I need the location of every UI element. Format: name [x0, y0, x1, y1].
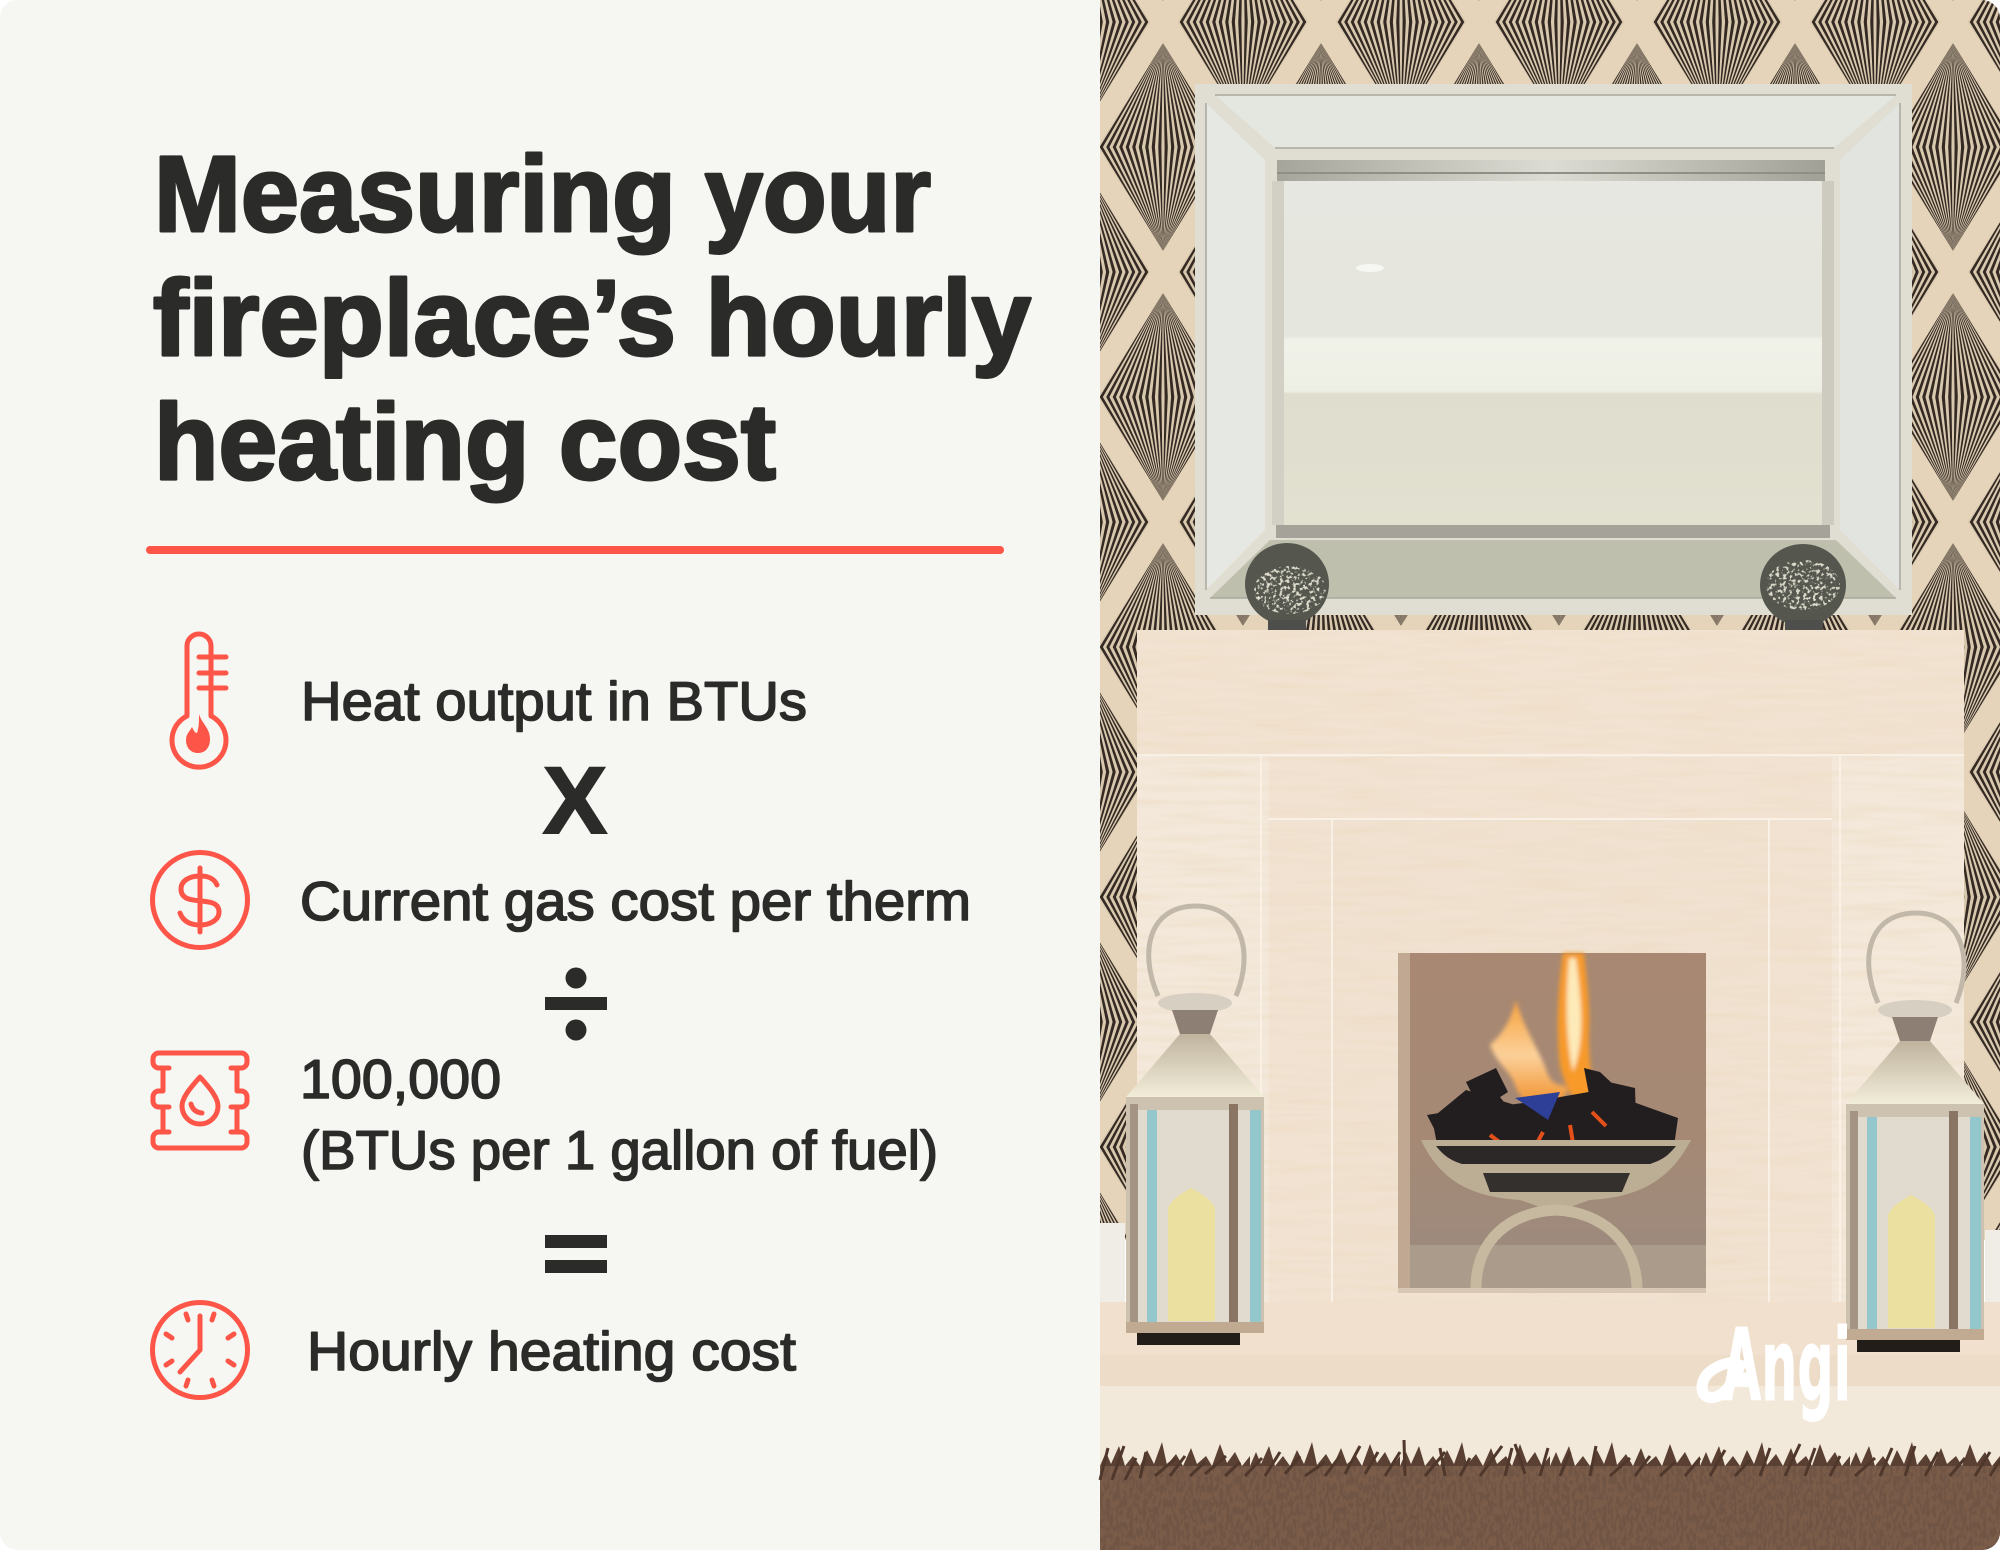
fire opening [1398, 953, 1706, 1293]
title rule [146, 546, 1004, 554]
baseboards [1100, 1223, 2000, 1302]
hearth and carpet [1100, 1302, 2000, 1476]
title: Measuring your [154, 133, 931, 254]
photo: fireplace [1100, 0, 2000, 1550]
flames [1488, 950, 1594, 1098]
fire basket [1421, 1140, 1691, 1288]
lantern: left [1126, 906, 1264, 1345]
fireplace surround [1137, 630, 1964, 1305]
logo: Angi [1696, 1324, 1847, 1422]
text: gas cost: Current gas cost per therm [300, 870, 971, 932]
icon: dollar coin [152, 852, 248, 948]
icon: fuel barrel [153, 1053, 247, 1148]
text: heat output: Heat output in BTUs [301, 670, 807, 732]
panel: formula [0, 0, 1100, 1550]
coal embers [1488, 1092, 1608, 1140]
mirror [1195, 84, 1912, 615]
rug [1100, 1440, 2000, 1550]
text: BTUs per gallon: 100,000 [300, 1048, 501, 1110]
title: heating cost [154, 381, 776, 502]
lantern: right [1846, 913, 1984, 1352]
title [153, 133, 1031, 502]
divide sign [545, 968, 607, 1040]
text: BTUs per gallon [300, 1048, 938, 1181]
icon: clock [152, 1302, 248, 1398]
text: BTUs per gallon: (BTUs per 1 gallon of fuel) [301, 1119, 938, 1181]
wallpaper [1100, 0, 2000, 1240]
title: fireplace’s hourly [153, 257, 1031, 378]
coals [1427, 1068, 1678, 1140]
text: hourly cost: Hourly heating cost [307, 1320, 796, 1382]
logo: Angi: Angi [1722, 1307, 1851, 1424]
equals sign [545, 1235, 607, 1273]
icon: thermometer with flame [172, 634, 226, 767]
multiply sign: X [543, 748, 607, 854]
vases [1245, 543, 1846, 632]
